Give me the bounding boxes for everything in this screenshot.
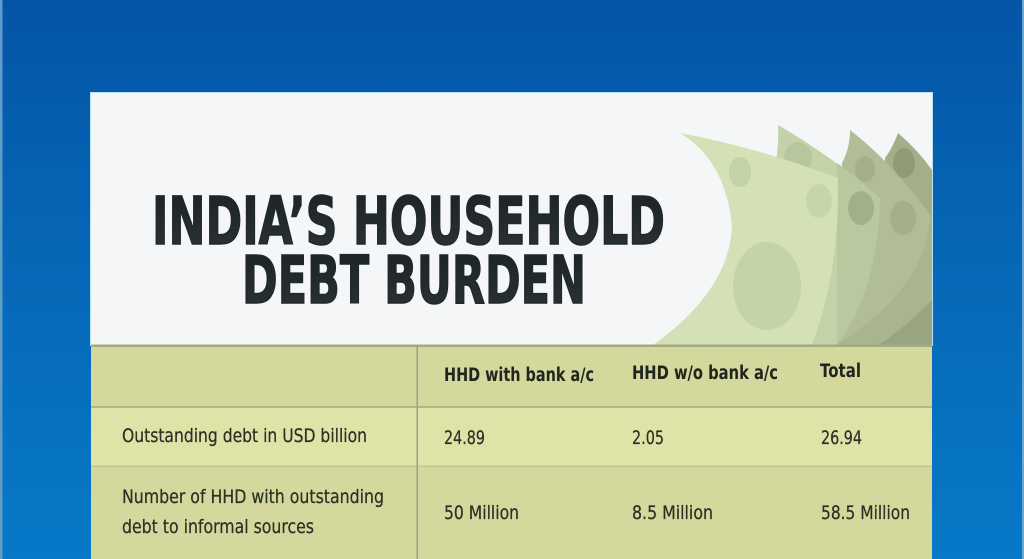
bill 2	[775, 125, 880, 345]
table row: number of HHD: Number of HHD with outstanding	[122, 486, 384, 508]
table row: number of HHD: 58.5 Million	[821, 502, 910, 524]
bill 1	[653, 133, 838, 345]
table row: outstanding debt: 24.89	[444, 427, 485, 449]
title: INDIA’S HOUSEHOLD	[152, 183, 665, 260]
table row: outstanding debt: Outstanding debt in USD billion	[122, 425, 367, 447]
table	[91, 344, 932, 559]
bill 3	[835, 130, 932, 345]
title	[152, 183, 665, 319]
table row: number of HHD: 50 Million	[444, 502, 519, 524]
bill 4	[885, 133, 932, 218]
header: Total: Total	[820, 361, 861, 382]
table row: outstanding debt: 26.94	[821, 427, 862, 449]
illustration: money bills	[653, 125, 932, 345]
header: HHD with bank a/c: HHD with bank a/c	[444, 365, 594, 386]
header: HHD w/o bank a/c: HHD w/o bank a/c	[632, 363, 778, 384]
title: DEBT BURDEN	[242, 242, 586, 319]
table header row	[91, 346, 932, 407]
panel: title area	[90, 92, 933, 346]
table row: outstanding debt: 2.05	[632, 427, 664, 449]
table row: number of HHD	[91, 466, 932, 559]
table row: number of HHD: 8.5 Million	[632, 502, 713, 524]
table row: outstanding debt	[91, 407, 932, 466]
table row: number of HHD: debt to informal sources	[122, 516, 314, 538]
bill 3 lower shade	[843, 235, 932, 344]
